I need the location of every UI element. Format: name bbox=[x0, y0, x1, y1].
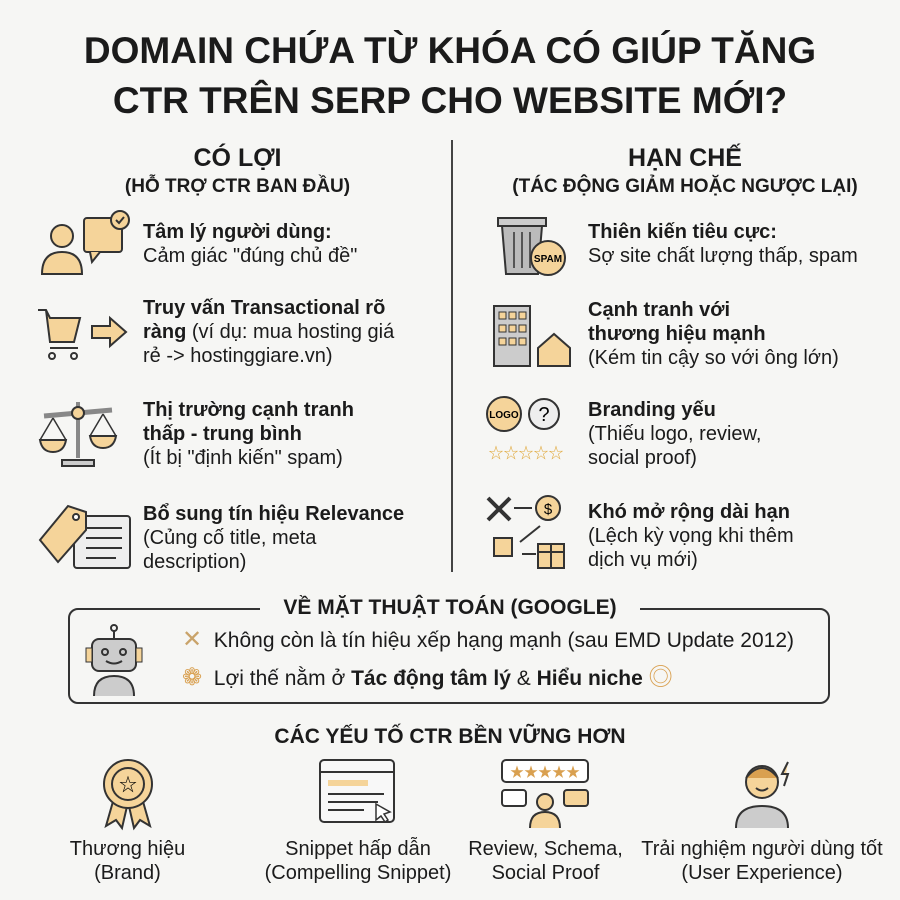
icon: trash spam bbox=[497, 217, 566, 276]
text: cạnh tranh thương hiệu: thương hiệu mạnh bbox=[588, 323, 766, 345]
text: truy vấn transactional: Truy vấn Transactional rõ bbox=[143, 297, 385, 319]
icon: logo stars bbox=[486, 396, 564, 462]
icon: logo stars: ? bbox=[538, 404, 550, 426]
text: cạnh tranh thương hiệu: Cạnh tranh với bbox=[588, 299, 730, 321]
text: khó mở rộng: dịch vụ mới) bbox=[588, 549, 698, 571]
factor: brand: ☆ bbox=[119, 775, 137, 795]
icon: logo stars: ☆☆☆☆☆ bbox=[488, 445, 564, 462]
icon: trash spam: SPAM bbox=[534, 254, 562, 265]
text: khó mở rộng: (Lệch kỳ vọng khi thêm bbox=[588, 525, 794, 547]
heading: hạn chế bbox=[512, 144, 858, 197]
heading: hạn chế: (TÁC ĐỘNG GIẢM HOẶC NGƯỢC LẠI) bbox=[512, 176, 858, 197]
text: branding yếu: (Thiếu logo, review, bbox=[588, 423, 761, 445]
factor: user experience: (User Experience) bbox=[681, 862, 843, 884]
text: thị trường cạnh tranh: Thị trường cạnh tranh bbox=[143, 399, 354, 421]
text: khó mở rộng bbox=[588, 501, 794, 571]
text: thiên kiến tiêu cực: Sợ site chất lượng thấp, spam bbox=[588, 245, 858, 267]
icon: tag and doc bbox=[38, 504, 131, 569]
text: bổ sung tín hiệu relevance: description) bbox=[143, 551, 246, 573]
factor: review: ★★★★★ bbox=[510, 764, 580, 780]
text: bổ sung tín hiệu relevance bbox=[143, 503, 404, 573]
text: lợi thế tâm lý: ❁ Lợi thế nằm ở Tác động tâm lý & Hiểu niche ◎ bbox=[182, 664, 673, 691]
text: tâm lý người dùng: Cảm giác "đúng chủ đề" bbox=[143, 245, 357, 267]
text: thiên kiến tiêu cực bbox=[588, 221, 858, 267]
factor: snippet bbox=[265, 759, 451, 884]
icon: cart arrow bbox=[38, 309, 128, 360]
factor: brand bbox=[70, 759, 185, 884]
text: bổ sung tín hiệu relevance: (Củng cố title, meta bbox=[143, 527, 316, 549]
text: khó mở rộng: Khó mở rộng dài hạn bbox=[588, 501, 790, 523]
text: truy vấn transactional bbox=[143, 297, 394, 367]
heading: các yếu tố ctr: CÁC YẾU TỐ CTR BỀN VỮNG HƠN bbox=[274, 725, 626, 748]
text: thiên kiến tiêu cực: Thiên kiến tiêu cực: bbox=[588, 221, 777, 243]
text: cạnh tranh thương hiệu: (Kém tin cậy so với ông lớn) bbox=[588, 347, 839, 369]
factor: user experience bbox=[641, 762, 883, 884]
factor: brand: Thương hiệu bbox=[70, 838, 185, 860]
panel: thuật toán google bbox=[68, 608, 830, 704]
icon: scale bbox=[38, 402, 118, 467]
heading: có lợi bbox=[125, 144, 350, 197]
text: bổ sung tín hiệu relevance: Bổ sung tín hiệu Relevance bbox=[143, 503, 404, 525]
factor: snippet: (Compelling Snippet) bbox=[265, 862, 451, 884]
icon: tools dollar gift: $ bbox=[544, 501, 553, 518]
icon: robot bbox=[86, 624, 142, 696]
heading: có lợi: (HỖ TRỢ CTR BAN ĐẦU) bbox=[125, 176, 350, 197]
heading: về mặt thuật toán: VỀ MẶT THUẬT TOÁN (GOOGLE) bbox=[283, 596, 617, 619]
text: thị trường cạnh tranh bbox=[143, 399, 354, 469]
icon: building house bbox=[493, 305, 571, 367]
text: thị trường cạnh tranh: (Ít bị "định kiến" spam) bbox=[143, 447, 343, 469]
icon: logo stars: LOGO bbox=[489, 410, 519, 421]
text: tâm lý người dùng bbox=[143, 221, 357, 267]
heading: có lợi: CÓ LỢI bbox=[194, 144, 282, 172]
icon: tools dollar gift bbox=[486, 495, 565, 569]
text: truy vấn transactional: ràng (ví dụ: mua hosting giá bbox=[143, 321, 394, 343]
text: branding yếu: Branding yếu bbox=[588, 399, 716, 421]
icon: user puzzle bbox=[41, 210, 130, 275]
text: thị trường cạnh tranh: thấp - trung bình bbox=[143, 423, 302, 445]
factor: brand: (Brand) bbox=[94, 862, 161, 884]
text: branding yếu: social proof) bbox=[588, 447, 697, 469]
factor: snippet: Snippet hấp dẫn bbox=[285, 838, 431, 860]
title: CTR TRÊN SERP CHO WEBSITE MỚI? bbox=[113, 80, 787, 121]
text: tâm lý người dùng: Tâm lý người dùng: bbox=[143, 221, 332, 243]
text: không còn tín hiệu: ✕ Không còn là tín hiệu xếp hạng mạnh (sau EMD Update 2012) bbox=[182, 626, 794, 653]
text: branding yếu bbox=[588, 399, 761, 469]
factor: review: Review, Schema, bbox=[468, 838, 623, 860]
factor: user experience: Trải nghiệm người dùng tốt bbox=[641, 838, 883, 860]
factor: review: Social Proof bbox=[492, 862, 599, 884]
title bbox=[84, 30, 816, 121]
text: truy vấn transactional: rẻ -> hostinggiare.vn) bbox=[143, 345, 333, 367]
title: DOMAIN CHỨA TỪ KHÓA CÓ GIÚP TĂNG bbox=[84, 30, 816, 71]
heading: hạn chế: HẠN CHẾ bbox=[628, 144, 742, 172]
text: cạnh tranh thương hiệu bbox=[588, 299, 839, 369]
factor: review bbox=[468, 759, 623, 884]
